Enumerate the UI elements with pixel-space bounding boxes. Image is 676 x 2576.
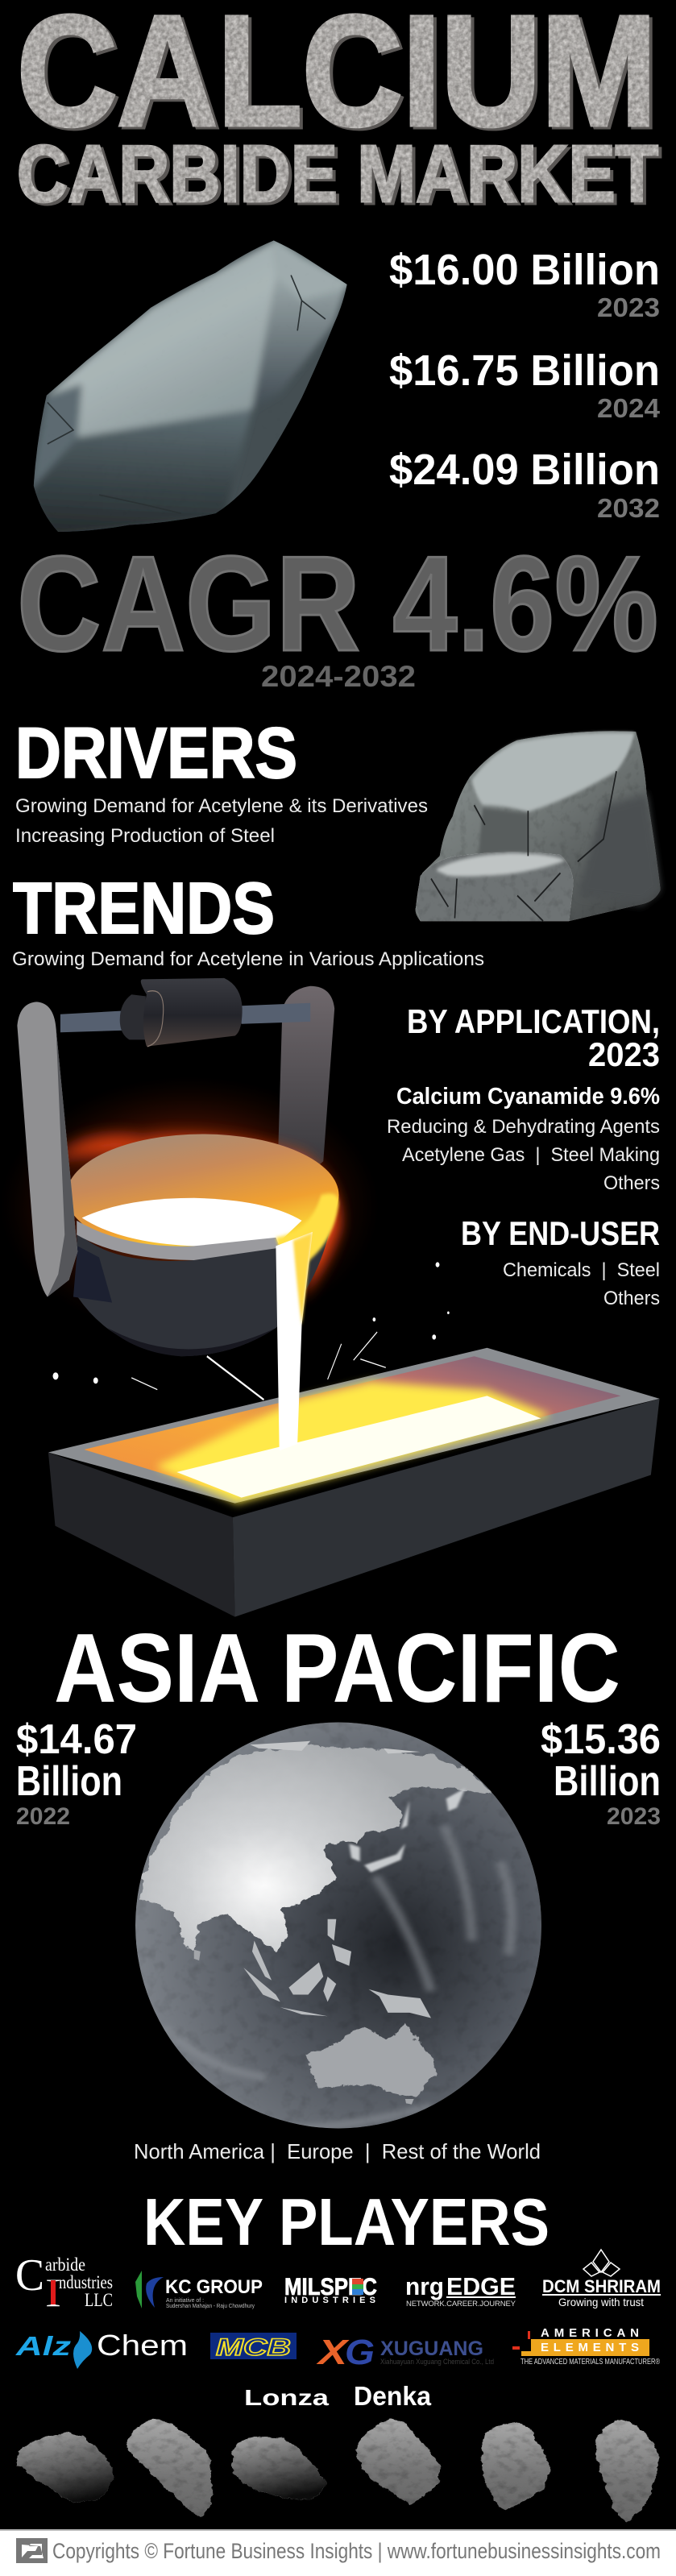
sparks [53,1263,449,1400]
logo: DCM Shriram: Growing with trust [558,2296,644,2308]
logo: DCM Shriram [542,2250,661,2308]
ladle right arm [278,986,334,1167]
pouring stream [276,1232,313,1450]
molten metal surface [82,1198,301,1246]
molten metal in trough [176,1396,541,1498]
title [17,0,658,219]
logo: Xuguang: Xiahuayuan Xuguang Chemical Co., Ltd [380,2358,494,2366]
drivers heading: DRIVERS [15,712,297,793]
logo: DCM Shriram: DCM SHRIRAM [542,2276,661,2296]
value 2024: $16.75 Billion [389,346,660,395]
flame behind bowl [52,1135,341,1297]
logo: Xuguang [315,2333,494,2372]
application list line 1: Reducing & Dehydrating Agents [387,1116,660,1138]
logo: KC Group [135,2271,263,2309]
logo: nrgEDGE: EDGE [446,2272,516,2300]
logo: KC Group: An initiative of : [166,2296,204,2304]
logo: American Elements: AMERICAN [541,2326,639,2340]
logo: Lonza: Lonza [244,2385,330,2410]
logo: MCB: MCB [216,2334,291,2361]
logo: Xuguang: XUGUANG [380,2337,483,2360]
drivers [15,712,428,847]
logo: nrgEDGE [405,2272,516,2308]
dominant application share: Calcium Cyanamide 9.6% [396,1084,660,1110]
trough left face [48,1452,235,1617]
logo: KC Group: KC GROUP [165,2276,263,2298]
value 2023: $16.00 Billion [389,246,660,294]
logo: KC Group: Sudershan Mahajan - Raju Chowdhury [166,2302,255,2309]
continents and cloud streaks [138,1741,512,2129]
driver 1: Growing Demand for Acetylene & its Derivatives [15,795,428,817]
2023 year: 2023 [607,1803,661,1830]
trough rim [48,1348,660,1504]
trends heading: TRENDS [13,869,275,949]
year 2032: 2032 [597,493,660,523]
CAGR headline [17,528,658,693]
value 2032: $24.09 Billion [389,446,660,494]
logo: American Elements [512,2326,660,2367]
logo: Carbide Industries LLC: ndustries [59,2272,113,2292]
footer [0,2529,676,2576]
bright spout edge [276,1194,338,1266]
key players heading: KEY PLAYERS [143,2184,550,2259]
Asia Pacific 2023 value [541,1716,661,1830]
footer logo icon [16,2538,48,2563]
other regions: North America | Europe | Rest of the World [134,2139,541,2163]
bracket on bowl [73,1246,112,1303]
glow around ladle [0,1076,379,1337]
driver 2: Increasing Production of Steel [15,825,275,847]
trends [12,869,484,970]
ocean [135,1723,541,2129]
segment text [387,1002,660,1309]
logo: Carbide Industries LLC: I [45,2270,61,2315]
logo: Xuguang: X [315,2333,350,2372]
logo: AlzChem: Chem [97,2329,188,2362]
2023 amount: $15.36 [541,1716,661,1763]
footer background [0,2530,676,2576]
ladle rim [77,1221,280,1260]
by application year: 2023 [588,1035,660,1073]
footer rule [0,2529,676,2531]
application list line 2: Acetylene Gas | Steel Making [402,1144,660,1166]
logo: nrgEDGE: nrg [405,2272,444,2300]
end-user list line 1: Chemicals | Steel [503,1259,660,1281]
CAGR period: 2024-2032 [261,660,416,693]
2022 year: 2022 [16,1803,70,1830]
trough glow [156,1382,552,1504]
ladle body [77,1221,332,1356]
year 2023: 2023 [597,292,660,322]
2022 unit: Billion [16,1758,122,1805]
end-user list line 2: Others [603,1288,660,1309]
logo: Carbide Industries LLC: LLC [85,2290,113,2310]
logo: AlzChem: Alz [15,2331,72,2361]
logo: Denka: Denka [354,2381,432,2411]
logo: Xuguang: G [345,2333,375,2372]
illustration: ladle pouring molten metal into trough [0,978,660,1617]
2022 amount: $14.67 [16,1716,137,1763]
market values [389,246,661,523]
illustration: large grey rock [26,231,354,537]
logo: American Elements: ELEMENTS [541,2341,639,2354]
trough interior [84,1356,620,1498]
illustration: globe [135,1723,541,2129]
illustration: grey boulder [416,731,661,921]
logo: nrgEDGE: NETWORK.CAREER.JOURNEY [406,2300,516,2308]
bowl interior [66,1135,339,1256]
logo: Carbide Industries LLC [15,2250,113,2315]
logo: MCB [210,2333,297,2361]
year 2024: 2024 [597,393,661,423]
row of six rocks [17,2419,660,2522]
ladle left arm [17,1002,77,1297]
logo: Milspec Industries: INDUSTRIES [284,2296,375,2305]
logo: AlzChem [15,2329,188,2369]
Asia Pacific 2022 value [16,1716,137,1830]
logo: Milspec Industries: MILSPEC [284,2274,377,2300]
ladle axle [60,978,310,1047]
logo: Carbide Industries LLC: C [15,2250,44,2300]
application list line 3: Others [603,1172,660,1194]
logo: Carbide Industries LLC: arbide [45,2255,85,2275]
trough right face [233,1399,660,1617]
trend 1: Growing Demand for Acetylene in Various Applications [12,948,484,970]
